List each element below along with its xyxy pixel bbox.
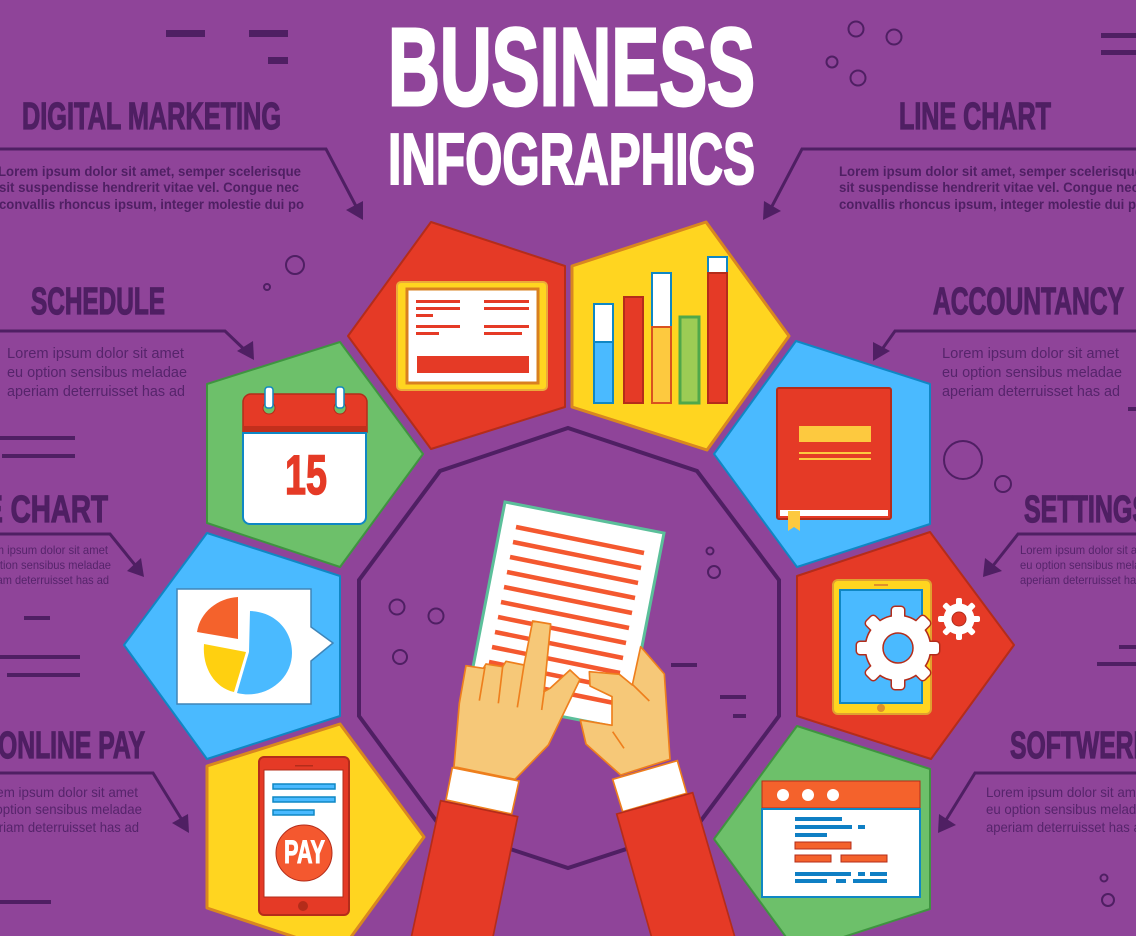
callout: schedule: eu option sensibus meladae (7, 364, 187, 381)
callout: digital marketing: DIGITAL MARKETING (22, 96, 281, 138)
icon: big gear (857, 607, 939, 689)
icon: phone with pay button: PAY (284, 834, 325, 870)
callout: schedule: aperiam deterruisset has ad (7, 383, 185, 400)
icon: small gear (938, 598, 980, 640)
callout: schedule: SCHEDULE (31, 281, 165, 323)
title (388, 6, 755, 200)
panel: accountancy pentagon (714, 341, 930, 567)
illustration: document held by hands (410, 502, 737, 936)
icon: tablet with gears (833, 580, 980, 714)
icon: calendar (243, 387, 367, 524)
title: BUSINESS (388, 6, 755, 129)
panel: schedule pentagon (207, 342, 423, 567)
icon: code window (762, 781, 920, 897)
icon: phone with pay button (259, 757, 349, 915)
panel: settings pentagon (797, 532, 1014, 759)
callout: online pay (0, 725, 189, 835)
callout: line chart (763, 96, 1136, 220)
panel: pie chart pentagon (124, 533, 340, 759)
panel: line chart pentagon (572, 222, 789, 450)
callout: digital marketing: convallis rhoncus ipsum, integer molestie dui po (0, 196, 304, 212)
bar chart (594, 257, 727, 403)
document (467, 502, 664, 729)
callout: software (938, 725, 1136, 835)
icon: calendar: 15 (285, 443, 327, 506)
panel: software pentagon (714, 726, 930, 936)
callout: digital marketing: Lorem ipsum dolor sit amet, semper scelerisque (0, 163, 301, 179)
callout: accountancy: Lorem ipsum dolor sit amet (942, 345, 1120, 362)
panel: online pay pentagon (207, 724, 424, 936)
callout: schedule: Lorem ipsum dolor sit amet (7, 345, 185, 362)
callout: pie chart (0, 489, 144, 587)
callout: line chart: LINE CHART (899, 96, 1051, 138)
callout: online pay: ONLINE PAY (0, 725, 145, 767)
callout: schedule (0, 281, 254, 400)
icon: pie chart card (177, 589, 333, 704)
callout: settings (983, 489, 1136, 587)
title: INFOGRAPHICS (388, 120, 755, 200)
callout: accountancy: eu option sensibus meladae (942, 364, 1122, 381)
right hand and sleeve (580, 647, 737, 936)
callout: accountancy: aperiam deterruisset has ad (942, 383, 1120, 400)
central octagon outline (359, 428, 779, 868)
callout: digital marketing: sit suspendisse hendrerit vitae vel. Congue nec (0, 179, 299, 195)
icon: ledger book (777, 388, 891, 531)
icon: marketing tablet (397, 282, 547, 390)
callout: digital marketing (0, 96, 363, 220)
panel: digital marketing pentagon (348, 222, 565, 449)
left hand and sleeve (410, 621, 580, 936)
callout: accountancy (873, 281, 1136, 400)
